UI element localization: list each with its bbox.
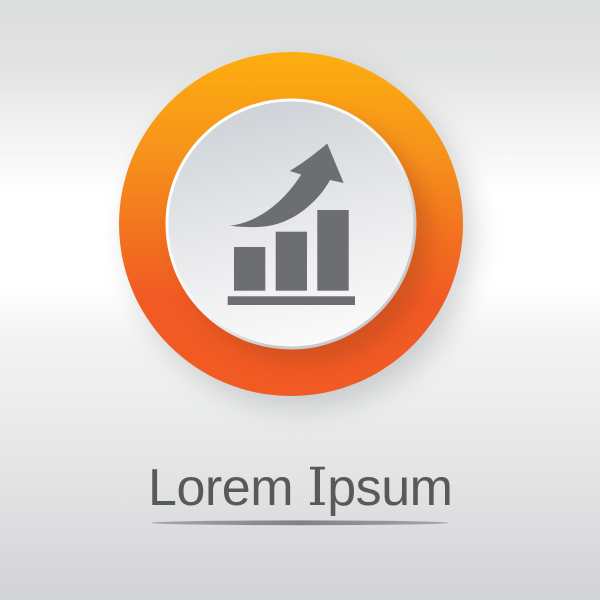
- inner disc shadow: [178, 112, 430, 364]
- title underline: [151, 520, 449, 525]
- badge drop shadow: [129, 64, 473, 408]
- bar 3: [317, 210, 349, 291]
- chart baseline: [228, 296, 355, 305]
- inner disc: [167, 100, 415, 348]
- title: Lorem Ipsum: [148, 458, 453, 518]
- orange ring: [119, 52, 463, 396]
- icon: growth chart with rising arrow: [228, 144, 355, 305]
- icon: rising arrow: [230, 144, 344, 227]
- bar 1: [234, 247, 265, 291]
- badge: [119, 52, 473, 408]
- bar 2: [276, 232, 307, 291]
